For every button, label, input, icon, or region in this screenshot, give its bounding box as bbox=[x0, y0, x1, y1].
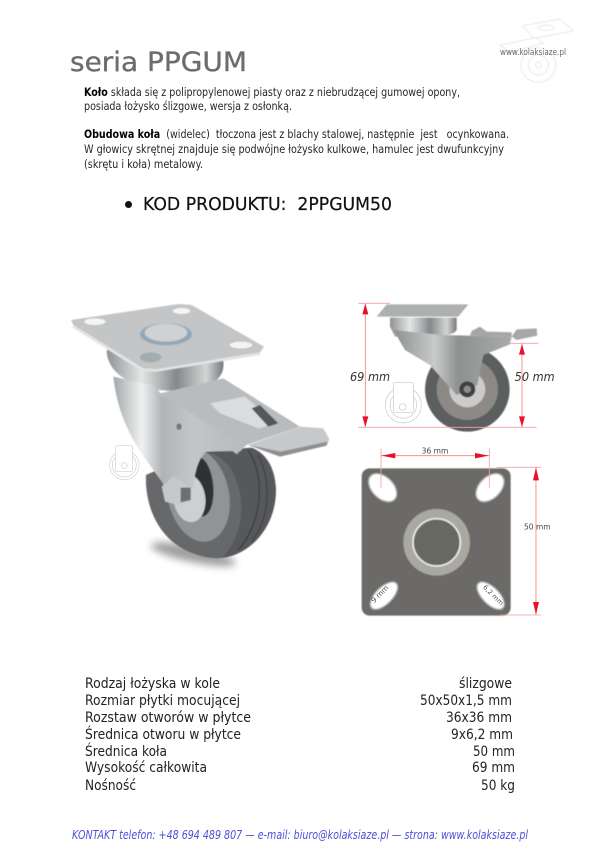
row: load capacity: Nośność bbox=[85, 778, 136, 794]
row: bearing type: ślizgowe bbox=[459, 676, 512, 692]
description: wheel: posiada łożysko ślizgowe, wersja z osłonką. bbox=[84, 99, 292, 113]
row: total height bbox=[85, 760, 515, 776]
description: housing: W głowicy skrętnej znajduje się podwójne łożysko kulkowe, hamulec jest dwufunkcyjny bbox=[84, 142, 504, 156]
title: seria PPGUM bbox=[70, 47, 247, 78]
description: housing: Obudowa koła (widelec) tłoczona jest z blachy stalowej, następnie jest ocynkowana. bbox=[84, 127, 509, 141]
illustration: side view with dimensions bbox=[350, 303, 555, 432]
row: wheel diameter bbox=[85, 742, 515, 760]
row: plate size: Rozmiar płytki mocującej bbox=[85, 693, 240, 709]
dimension: height 69 mm: 69 mm bbox=[350, 370, 390, 384]
dimension: wheel 50 mm bbox=[515, 344, 555, 427]
row: hole spacing: Rozstaw otworów w płytce bbox=[85, 710, 251, 726]
row: bearing type bbox=[85, 676, 512, 692]
description: housing: (skrętu i koła) metalowy. bbox=[84, 157, 203, 171]
caster side view bbox=[377, 304, 537, 432]
description: housing bbox=[84, 127, 509, 171]
illustration: mounting plate with dimensions bbox=[362, 445, 551, 616]
row: hole diameter bbox=[85, 725, 513, 743]
row: hole spacing bbox=[85, 710, 512, 726]
row: plate size bbox=[85, 693, 512, 709]
ghost logo bbox=[110, 446, 139, 480]
specification table bbox=[85, 676, 515, 794]
neck bbox=[107, 350, 224, 391]
row: plate size: 50x50x1,5 mm bbox=[420, 693, 512, 709]
logo watermark bbox=[500, 19, 573, 82]
illustration: swivel caster with brake bbox=[71, 304, 329, 571]
row: hole diameter: 9x6,2 mm bbox=[451, 727, 513, 743]
dimension: 36 mm bbox=[381, 445, 489, 488]
description: wheel: Koło składa się z polipropylenowej piasty oraz z niebrudzącej gumowej opony, bbox=[84, 85, 460, 99]
row: load capacity: 50 kg bbox=[481, 778, 515, 794]
brake plate bbox=[160, 378, 300, 454]
fork bbox=[113, 377, 242, 505]
logo watermark: www.kolaksiaze.pl bbox=[500, 48, 566, 58]
caster body bbox=[71, 304, 329, 505]
dimension: 50 mm: 50 mm bbox=[524, 521, 551, 531]
row: hole spacing: 36x36 mm bbox=[446, 710, 512, 726]
bolt bbox=[162, 477, 192, 505]
hole label 9 mm: 9 mm bbox=[369, 583, 390, 605]
description: wheel bbox=[84, 85, 460, 113]
hole label 6,2 mm: 6,2 mm bbox=[481, 583, 505, 607]
plate bbox=[362, 468, 511, 616]
row: total height: 69 mm bbox=[472, 760, 515, 776]
product code: KOD PRODUKTU: 2PPGUM50 bbox=[143, 194, 392, 215]
row: hole diameter: Średnica otworu w płytce bbox=[85, 725, 241, 743]
row: load capacity bbox=[85, 778, 515, 794]
top plate bbox=[71, 304, 264, 369]
dimension: 36 mm: 36 mm bbox=[422, 445, 448, 455]
wheel bbox=[146, 442, 276, 558]
dimension: 50 mm bbox=[497, 467, 551, 615]
row: bearing type: Rodzaj łożyska w kole bbox=[85, 676, 220, 692]
row: total height: Wysokość całkowita bbox=[85, 760, 207, 776]
dimension: height 69 mm bbox=[350, 303, 538, 427]
lever bbox=[248, 427, 329, 457]
shadow bbox=[149, 537, 237, 571]
row: wheel diameter: 50 mm bbox=[473, 744, 515, 760]
row: wheel diameter: Średnica koła bbox=[85, 742, 167, 760]
dimension: wheel 50 mm: 50 mm bbox=[515, 370, 555, 384]
ghost logo bbox=[385, 382, 421, 423]
